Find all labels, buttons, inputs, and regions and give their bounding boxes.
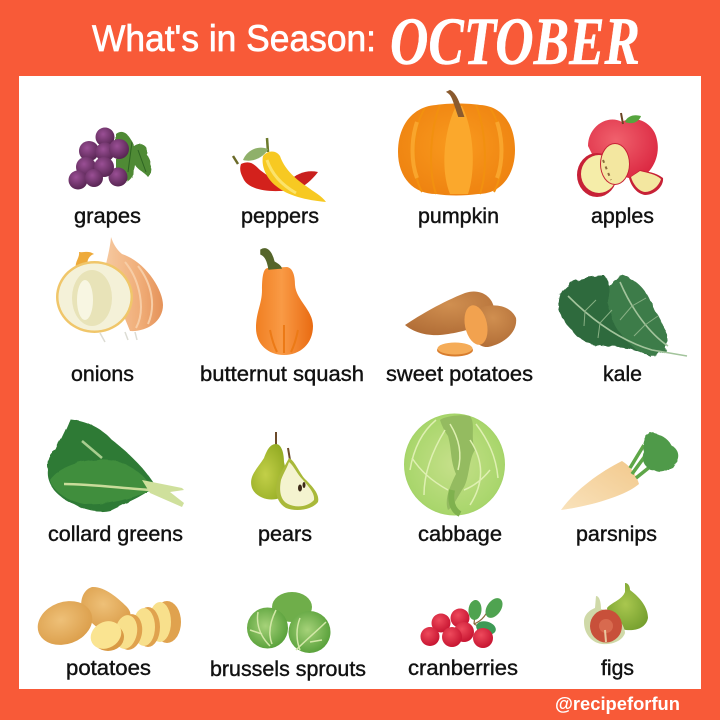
icon: apples	[577, 113, 663, 197]
icon: onions	[56, 237, 163, 342]
label: butternut squash: butternut squash	[200, 363, 364, 386]
label: onions: onions	[71, 363, 134, 386]
icon: collard greens	[47, 419, 184, 512]
title: month: OCTOBER	[390, 3, 640, 79]
item: pears	[251, 432, 318, 546]
icon: kale	[558, 275, 687, 356]
item: cabbage	[404, 414, 505, 546]
item: potatoes	[32, 587, 181, 680]
item: collard greens	[47, 419, 184, 546]
item: kale	[558, 275, 687, 386]
label: peppers: peppers	[241, 205, 319, 228]
item: butternut squash	[200, 249, 364, 386]
label: apples: apples	[591, 205, 654, 228]
title	[92, 3, 640, 79]
item: sweet potatoes	[386, 291, 533, 386]
icon: parsnips	[561, 432, 678, 510]
icon: cranberries	[420, 595, 506, 648]
item: peppers	[233, 138, 326, 228]
icon: figs	[584, 583, 648, 644]
label: figs: figs	[601, 657, 634, 680]
label: pears: pears	[258, 523, 312, 546]
icon: pumpkin	[398, 91, 515, 196]
icon: butternut squash	[256, 249, 313, 355]
icon: peppers	[233, 138, 326, 202]
label: brussels sprouts: brussels sprouts	[210, 658, 366, 681]
label: sweet potatoes: sweet potatoes	[386, 363, 533, 386]
item: parsnips	[561, 432, 678, 546]
item: grapes	[68, 128, 151, 228]
label: potatoes: potatoes	[66, 657, 151, 680]
icon: sweet potatoes	[405, 291, 516, 356]
label: kale: kale	[603, 363, 642, 386]
label: pumpkin: pumpkin	[418, 205, 499, 228]
credit: handle: @recipeforfun	[555, 694, 680, 714]
icon: potatoes	[32, 587, 181, 654]
label: grapes: grapes	[74, 205, 141, 228]
item: onions	[56, 237, 163, 386]
item: apples	[577, 113, 663, 228]
item: cranberries	[408, 595, 518, 680]
item: pumpkin	[398, 91, 515, 228]
icon: grapes	[68, 128, 151, 190]
icon: cabbage	[404, 414, 505, 516]
label: cranberries: cranberries	[408, 657, 518, 680]
item: figs	[584, 583, 648, 680]
label: cabbage: cabbage	[418, 523, 502, 546]
icon: brussels sprouts	[247, 592, 330, 653]
label: collard greens: collard greens	[48, 523, 183, 546]
item: brussels sprouts	[210, 592, 366, 681]
title: what's in season: What's in Season:	[92, 18, 376, 59]
icon: pears	[251, 432, 318, 510]
label: parsnips: parsnips	[576, 523, 657, 546]
